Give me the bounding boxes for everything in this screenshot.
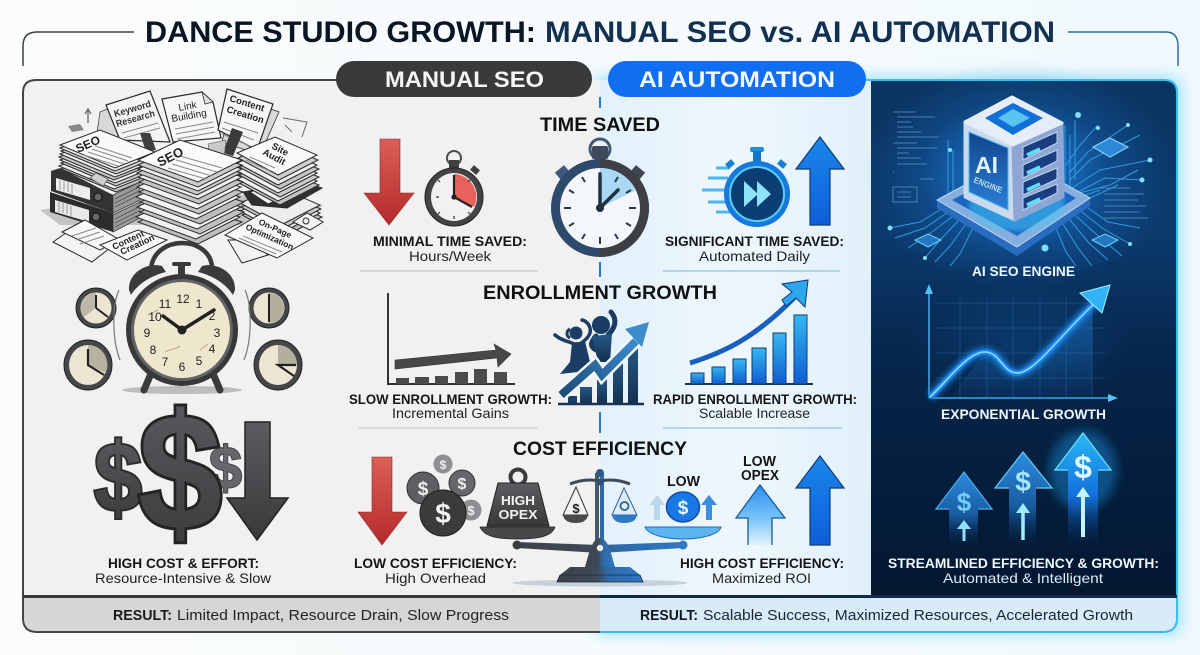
result bar: AI: [600, 595, 1177, 631]
stack: center: SEO: [155, 144, 186, 170]
chart: exponential growth: [925, 284, 1118, 402]
label: high cost efficiency: [680, 556, 844, 586]
server cube: ENGINE: [972, 175, 1004, 195]
illustration: dollar signs and down arrow: $: [94, 423, 142, 532]
icon: high opex weight: OPEX: [498, 507, 538, 522]
illustration: alarm clock: 11: [159, 297, 172, 311]
illustration: alarm clock: 10: [148, 310, 162, 324]
label: rapid enrollment growth: [653, 392, 857, 421]
title: MANUAL SEO vs. AI AUTOMATION: [545, 16, 1055, 49]
label: slow enrollment growth: Incremental Gains: [392, 405, 509, 421]
icon: balance scale: [512, 469, 688, 586]
heading: cost efficiency: COST EFFICIENCY: [513, 439, 687, 460]
pill: AI automation: [608, 61, 866, 97]
result bar: manual: Limited Impact, Resource Drain, Slow Progress: [177, 607, 509, 624]
icon: low coin on blue pan: LOW: [667, 474, 700, 490]
icon: large stopwatch: [551, 139, 649, 257]
icon: three glowing dollar arrows: [936, 430, 1117, 545]
label: low cost efficiency: LOW COST EFFICIENCY:: [354, 556, 517, 571]
pill: manual SEO: [336, 61, 592, 97]
icon: coins: $: [467, 503, 475, 518]
icon: high opex weight: [480, 470, 555, 539]
label: exponential growth: EXPONENTIAL GROWTH: [941, 406, 1106, 422]
icon: low coin on blue pan: [645, 474, 721, 539]
circuit traces: [890, 120, 1150, 266]
icon: low opex arrow: [736, 454, 785, 545]
back sheet: link building: Link: [178, 100, 199, 114]
arrow: blue up, time: [796, 137, 844, 225]
icon: high opex weight: HIGH: [501, 493, 535, 508]
illustration: small clock top right: [249, 288, 289, 328]
label: slow enrollment growth: [349, 392, 552, 421]
icon: coins: $: [435, 498, 451, 529]
title: DANCE STUDIO GROWTH:: [145, 16, 536, 49]
illustration: alarm clock: 3: [214, 326, 221, 340]
illustration: alarm clock: 5: [196, 354, 203, 368]
stack: center: [136, 140, 244, 244]
arrow medium: $: [1015, 466, 1031, 497]
ground sheets: Creation: [119, 232, 156, 257]
stack: left: [59, 130, 156, 192]
illustration: dollar signs and down arrow: [94, 380, 288, 564]
label: streamlined efficiency: [888, 556, 1159, 586]
illustration: alarm clock: 9: [144, 326, 151, 340]
icon: coins: [407, 454, 482, 536]
label: significant time saved: [665, 234, 844, 264]
icon: small stopwatch: [425, 151, 483, 226]
chip platform: [937, 157, 1090, 256]
arrow small: $: [957, 487, 972, 517]
label: high cost efficiency: Maximized ROI: [712, 570, 811, 586]
server cube: [965, 97, 1063, 220]
label: significant time saved: Automated Daily: [699, 248, 810, 264]
back sheet: link building: [162, 92, 221, 142]
label: high cost and effort: [95, 555, 272, 586]
arrow small: [936, 472, 992, 545]
stack: right: [237, 137, 322, 237]
pill: AI automation: AI AUTOMATION: [639, 67, 835, 92]
illustration: small clock bottom left: [64, 340, 112, 390]
result bar: manual: [23, 595, 600, 631]
back sheet: keyword research: Keyword: [113, 99, 153, 120]
stack: right: Site: [270, 141, 290, 159]
dancer: woman: [555, 320, 590, 374]
ground sheets: [53, 213, 323, 263]
back sheet: content creation: Creation: [225, 104, 265, 126]
chart: slow growth: [388, 293, 515, 384]
icon: coins: $: [440, 458, 447, 472]
label: streamlined efficiency: STREAMLINED EFFICIENCY & GROWTH:: [888, 556, 1159, 571]
label: minimal time saved: MINIMAL TIME SAVED:: [373, 234, 527, 249]
arrow: red down, time: [364, 139, 414, 225]
ground sheets: On-Page: [257, 217, 293, 240]
illustration: alarm clock: 7: [162, 355, 169, 369]
illustration: alarm clock: 6: [179, 360, 186, 374]
illustration: alarm clock: 8: [150, 343, 157, 357]
rising bars: [558, 347, 644, 404]
binders: [50, 168, 140, 232]
heading: time saved: TIME SAVED: [540, 115, 660, 136]
pill: manual SEO: MANUAL SEO: [385, 67, 544, 92]
back sheet: content creation: Content: [228, 93, 266, 115]
label: rapid enrollment growth: Scalable Increase: [699, 405, 810, 421]
arrow medium: [995, 452, 1052, 545]
right small pan: [612, 488, 637, 523]
illustration: dollar signs and down arrow: $: [209, 435, 242, 501]
rising arrow: [561, 322, 649, 395]
arrow: blue up, cost: [796, 456, 844, 545]
stack: left: SEO: [74, 133, 102, 156]
back sheet: keyword research: Research: [115, 108, 156, 130]
illustration: dancers on rising chart: [555, 312, 649, 404]
left small pan: [563, 487, 588, 523]
label: AI SEO engine: AI SEO ENGINE: [972, 263, 1075, 279]
illustration: paper stacks and binders: [40, 89, 323, 263]
label: minimal time saved: [373, 234, 527, 264]
illustration: alarm clock: 1: [196, 297, 203, 311]
illustration: dollar signs and down arrow: $: [138, 380, 222, 564]
illustration: small clock bottom right: [254, 340, 302, 390]
illustration: alarm clock: 4: [209, 342, 216, 356]
back sheet: link building: Building: [171, 108, 208, 125]
back sheet: keyword research: [106, 91, 170, 142]
label: minimal time saved: Hours/Week: [409, 248, 492, 264]
title: [145, 16, 1055, 49]
code snippets: [893, 112, 1148, 218]
result bar: AI: RESULT:: [640, 607, 698, 624]
circuit nodes: [888, 112, 1152, 260]
label: low cost efficiency: [354, 556, 517, 586]
icon: low opex arrow: OPEX: [741, 468, 779, 484]
heading: enrollment growth: ENROLLMENT GROWTH: [483, 283, 717, 304]
ground sheets: Optimization: [244, 222, 295, 252]
left small pan: $: [572, 501, 580, 516]
icon: AI fast stopwatch: [702, 147, 790, 227]
illustration: alarm clock: 2: [209, 309, 216, 323]
icon: coins: $: [418, 479, 429, 500]
ground sheets: Content: [111, 228, 146, 252]
illustration: small clock top left: [76, 288, 116, 328]
label: low cost efficiency: High Overhead: [385, 570, 486, 586]
illustration: AI engine: [888, 97, 1152, 266]
label: high cost efficiency: HIGH COST EFFICIENCY:: [680, 556, 844, 571]
label: slow enrollment growth: SLOW ENROLLMENT GROWTH:: [349, 392, 552, 407]
label: high cost and effort: HIGH COST & EFFORT:: [108, 555, 259, 571]
stack: right: Audit: [261, 147, 288, 168]
arrow large: $: [1074, 449, 1092, 485]
dancer: man: [591, 312, 615, 362]
icon: low opex arrow: LOW: [743, 454, 776, 470]
back sheet: content creation: [218, 89, 279, 155]
label: significant time saved: SIGNIFICANT TIME SAVED:: [665, 234, 844, 249]
label: streamlined efficiency: Automated & Intelligent: [943, 570, 1103, 586]
label: high cost and effort: Resource-Intensive & Slow: [95, 570, 272, 586]
server cube: AI: [975, 152, 998, 178]
result bar: AI: Scalable Success, Maximized Resources, Accelerated Growth: [703, 607, 1133, 624]
arrow: red down, cost: [358, 457, 407, 545]
icon: low coin on blue pan: $: [678, 498, 689, 519]
illustration: alarm clock: 12: [176, 292, 190, 306]
label: rapid enrollment growth: RAPID ENROLLMENT GROWTH:: [653, 392, 857, 407]
icon: coins: $: [458, 476, 467, 493]
illustration: alarm clock: [114, 243, 250, 394]
result bar: manual: RESULT:: [113, 607, 172, 624]
chart: rapid growth: [685, 280, 813, 384]
arrow large: [1055, 433, 1111, 545]
